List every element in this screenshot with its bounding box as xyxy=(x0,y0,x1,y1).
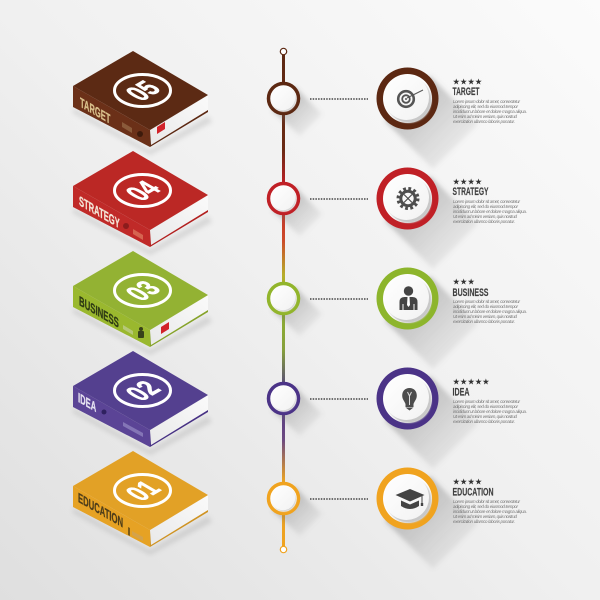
text block: business: exercitation ullamco laboris ponatur. xyxy=(453,319,515,324)
timeline node 02 xyxy=(268,384,322,436)
icon badge 05: target xyxy=(376,68,478,169)
connector 04 xyxy=(310,198,368,200)
text block: business: Lorem ipsum dolor sit amet, consectetur xyxy=(453,299,520,304)
icon: gear xyxy=(398,188,418,208)
text block: strategy: incididunt ut labore et dolore magna aliqua. xyxy=(453,209,527,214)
text block: business: ★★★ xyxy=(452,276,475,286)
text block: target: incididunt ut labore et dolore magna aliqua. xyxy=(453,109,527,114)
connector 01 xyxy=(310,498,368,500)
text block: strategy: ★★★★ xyxy=(452,176,482,186)
book 04: strategy xyxy=(73,151,212,255)
text block: idea: Lorem ipsum dolor sit amet, consectetur xyxy=(453,399,520,404)
text block: education: EDUCATION xyxy=(452,486,494,498)
icon: graduation cap xyxy=(396,489,424,509)
text block: education: Ut enim ad minim veniam, quis nostrud xyxy=(453,514,517,519)
book 05: target: TARGET xyxy=(80,94,111,127)
text block: strategy xyxy=(452,176,527,224)
text block: strategy: Lorem ipsum dolor sit amet, consectetur xyxy=(453,199,520,204)
timeline line xyxy=(282,52,285,549)
text block: target: TARGET xyxy=(452,86,480,98)
text block: business: adipiscing elit, sed do eiusmod tempor xyxy=(453,304,518,309)
icon: person xyxy=(400,286,418,310)
text block: strategy: STRATEGY xyxy=(452,186,489,198)
book 05: target: 05 xyxy=(119,77,168,105)
icon badge 04: strategy xyxy=(376,168,478,269)
text block: target: ★★★★ xyxy=(452,76,482,86)
text block: education: adipiscing elit, sed do eiusmod tempor xyxy=(453,504,518,509)
timeline bottom cap xyxy=(280,546,287,553)
text block: idea: IDEA xyxy=(452,386,470,398)
text block: business: Ut enim ad minim veniam, quis nostrud xyxy=(453,314,517,319)
icon badge 02: idea xyxy=(376,368,478,469)
text block: idea: Ut enim ad minim veniam, quis nostrud xyxy=(453,414,517,419)
connector 05 xyxy=(310,98,368,100)
book 04: strategy: 04 xyxy=(119,177,168,205)
book 01: education xyxy=(73,451,212,555)
text block: education xyxy=(452,476,527,524)
text block: target: Lorem ipsum dolor sit amet, consectetur xyxy=(453,99,520,104)
text block: strategy: adipiscing elit, sed do eiusmod tempor xyxy=(453,204,518,209)
icon: target xyxy=(398,90,423,107)
text block: strategy: exercitation ullamco laboris ponatur. xyxy=(453,219,515,224)
text block: education: incididunt ut labore et dolore magna aliqua. xyxy=(453,509,527,514)
text block: business: BUSINESS xyxy=(452,287,488,299)
book 04: strategy: STRATEGY xyxy=(79,193,120,232)
text block: business: incididunt ut labore et dolore magna aliqua. xyxy=(453,309,527,314)
book 03: business xyxy=(73,251,212,355)
book 05: target xyxy=(73,51,212,155)
timeline node 01 xyxy=(268,484,322,536)
book 01: education: 01 xyxy=(119,477,168,505)
timeline node 05 xyxy=(268,84,322,136)
icon badge 01: education xyxy=(376,468,478,569)
text block: education: Lorem ipsum dolor sit amet, consectetur xyxy=(453,499,520,504)
text block: idea xyxy=(452,376,527,424)
icon badge 03: business xyxy=(376,268,478,369)
text block: education: ★★★★ xyxy=(452,476,482,486)
book 02: idea xyxy=(73,351,212,455)
text block: strategy: Ut enim ad minim veniam, quis nostrud xyxy=(453,214,517,219)
text block: education: exercitation ullamco laboris ponatur. xyxy=(453,519,515,524)
text block: idea: ★★★★★ xyxy=(452,376,490,386)
timeline node 03 xyxy=(268,284,322,336)
text block: target xyxy=(452,76,527,124)
timeline node 04 xyxy=(268,184,322,236)
text block: target: exercitation ullamco laboris ponatur. xyxy=(453,119,515,124)
book 01: education: EDUCATION xyxy=(78,490,123,531)
connector 03 xyxy=(310,298,368,300)
connector 02 xyxy=(310,398,368,400)
text block: idea: incididunt ut labore et dolore magna aliqua. xyxy=(453,409,527,414)
icon: light bulb xyxy=(402,388,417,410)
text block: business xyxy=(452,276,527,324)
book 02: idea: IDEA xyxy=(78,390,96,415)
text block: target: adipiscing elit, sed do eiusmod tempor xyxy=(453,104,518,109)
book 03: business: BUSINESS xyxy=(79,293,119,331)
book 02: idea: 02 xyxy=(119,377,168,405)
timeline top cap xyxy=(280,48,287,55)
text block: target: Ut enim ad minim veniam, quis nostrud xyxy=(453,114,517,119)
text block: idea: adipiscing elit, sed do eiusmod tempor xyxy=(453,404,518,409)
text block: idea: exercitation ullamco laboris ponatur. xyxy=(453,419,515,424)
book 03: business: 03 xyxy=(119,277,168,305)
